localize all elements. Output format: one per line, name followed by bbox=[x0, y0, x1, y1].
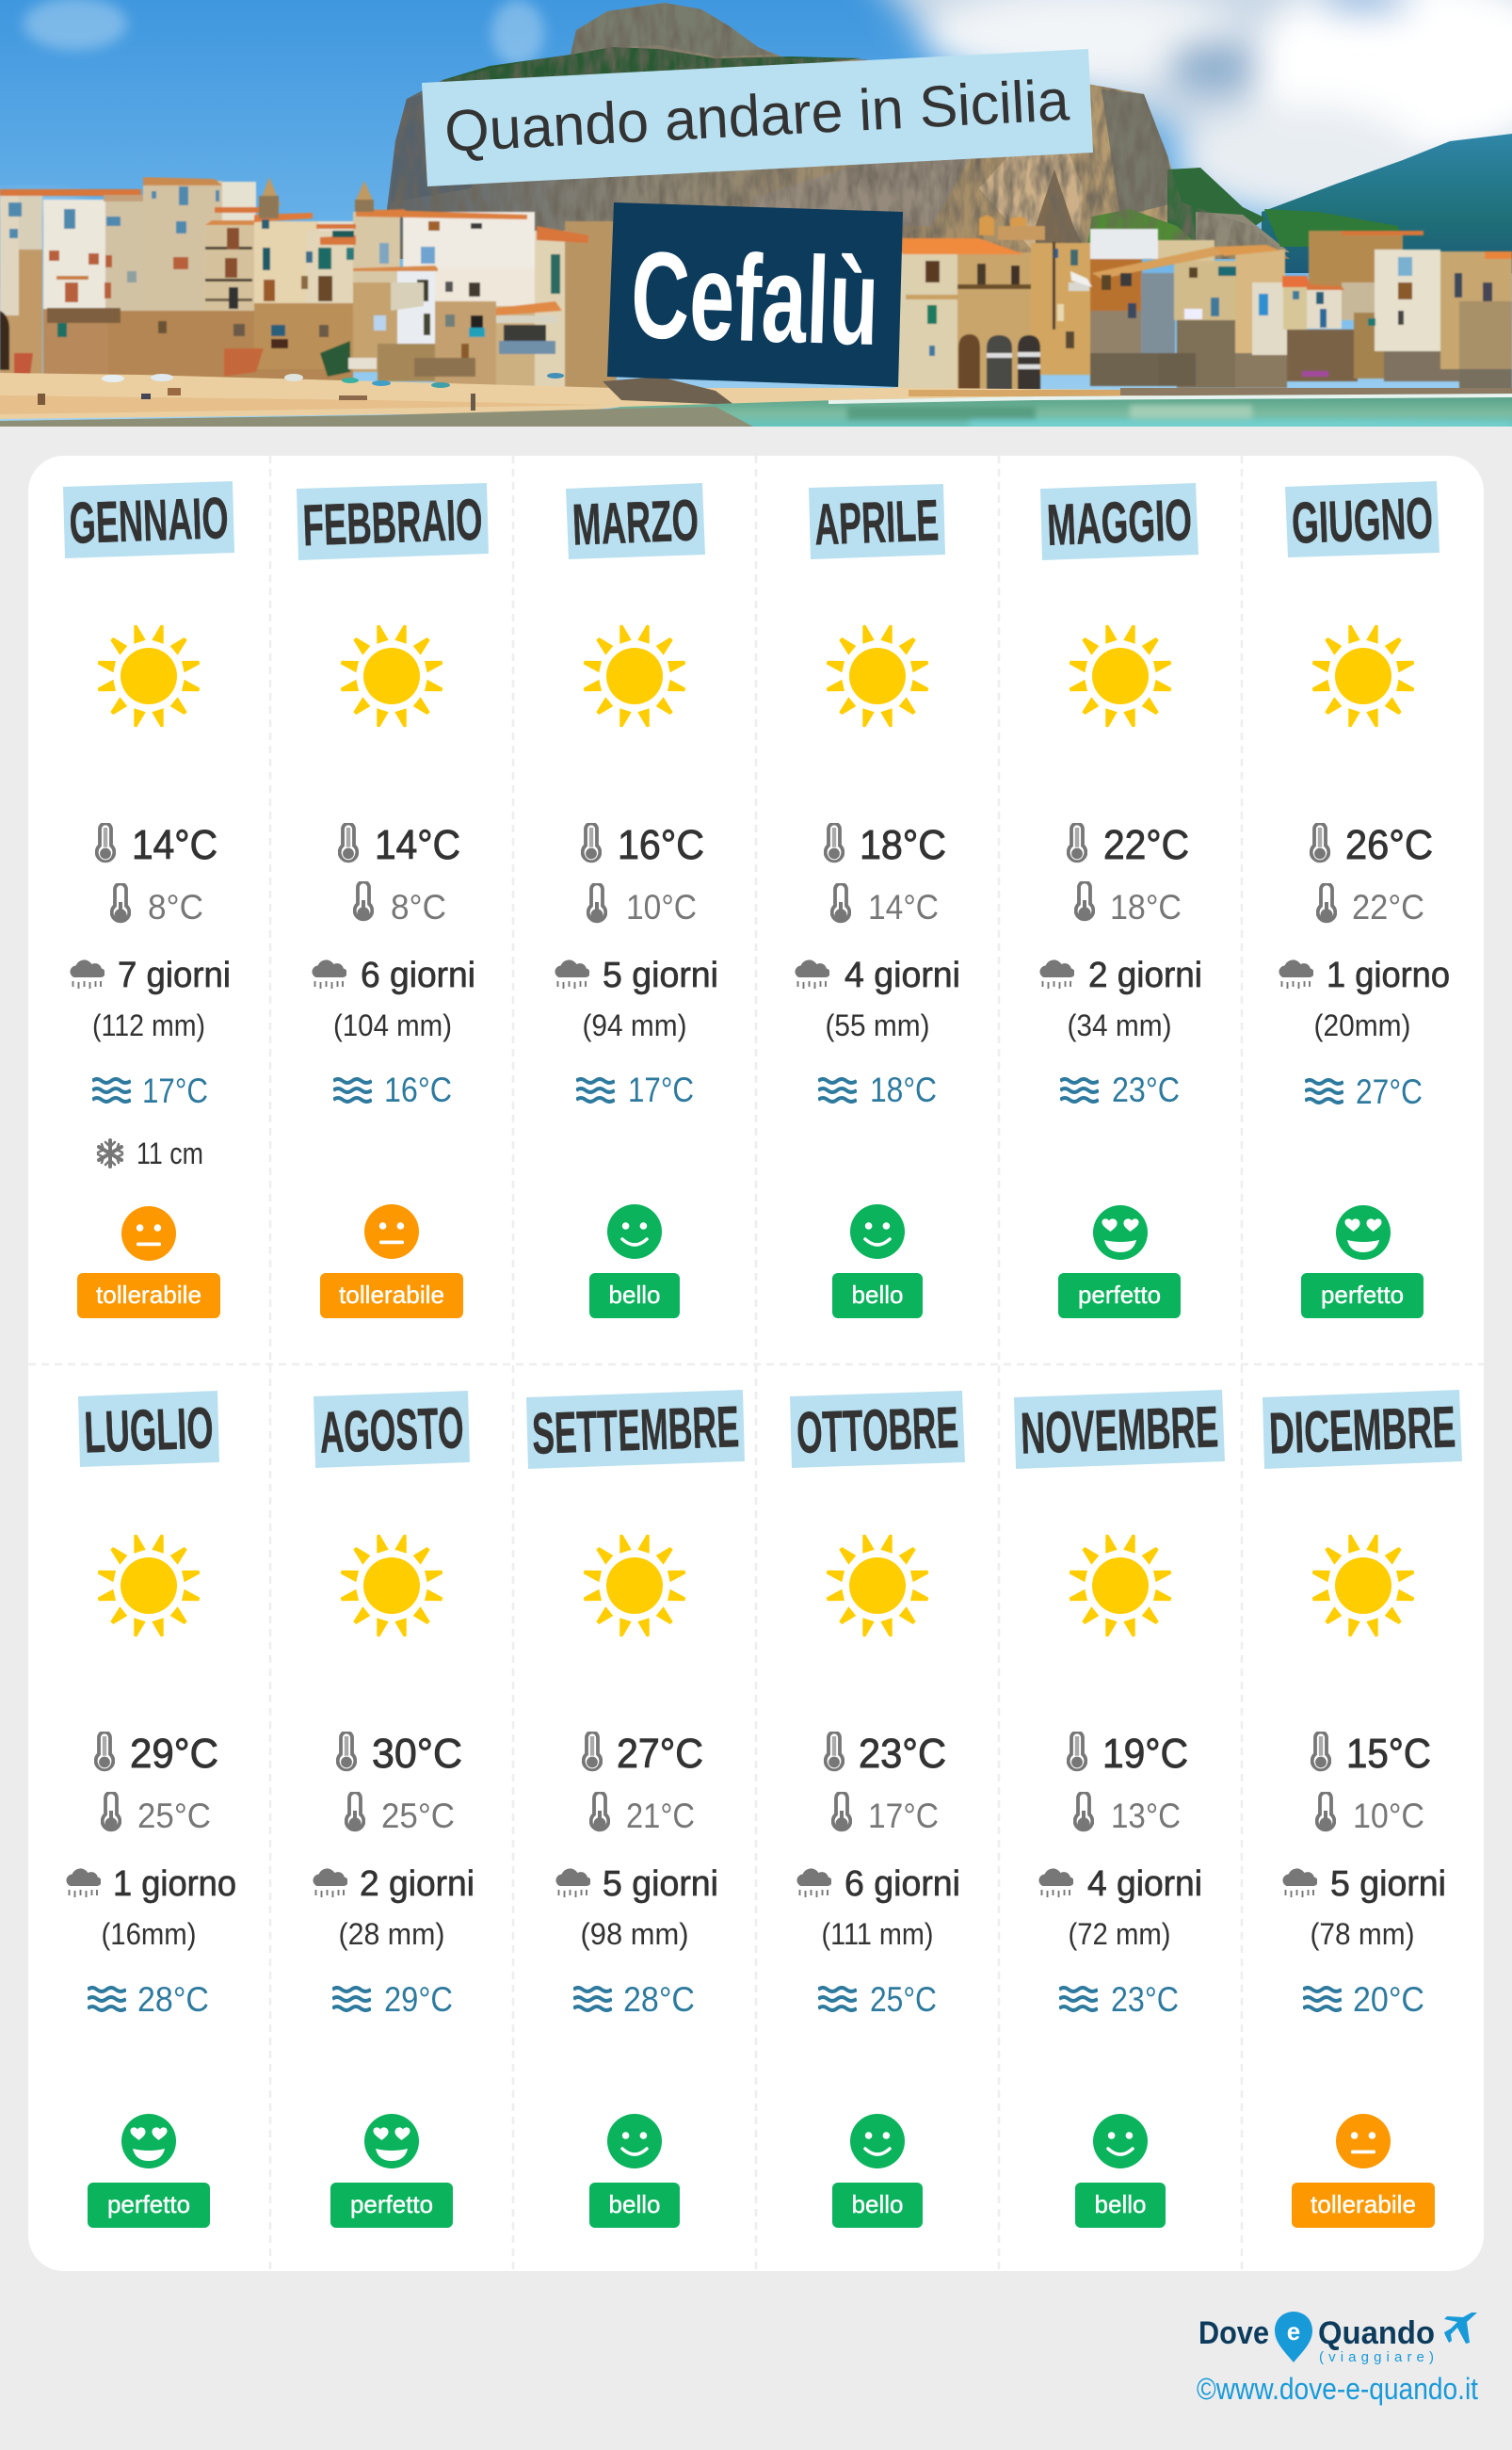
sea temperature: 23°C bbox=[1112, 1071, 1180, 1109]
month label: SETTEMBRE bbox=[531, 1394, 740, 1467]
rainfall: (104 mm) bbox=[333, 1008, 452, 1042]
min temperature bbox=[1318, 883, 1424, 927]
month label: NOVEMBRE bbox=[1020, 1394, 1219, 1467]
month label: OTTOBRE bbox=[796, 1395, 959, 1466]
rainfall: (55 mm) bbox=[825, 1008, 930, 1042]
max temperature bbox=[826, 1731, 946, 1777]
max temperature: 15°C bbox=[1346, 1731, 1431, 1777]
max temperature bbox=[97, 822, 217, 868]
icon: sun bbox=[827, 1535, 928, 1636]
rating face bbox=[1336, 1205, 1391, 1260]
min temperature bbox=[1317, 1793, 1424, 1835]
max temperature bbox=[340, 822, 460, 868]
city name box: Cefalù bbox=[629, 225, 881, 371]
panel: dicembre bbox=[1263, 1390, 1462, 2228]
panel: maggio bbox=[1039, 483, 1202, 1318]
month label bbox=[78, 1391, 219, 1467]
rain days bbox=[1039, 956, 1202, 995]
rain days: 4 giorni bbox=[844, 956, 960, 995]
icon: sun bbox=[341, 1535, 442, 1636]
month label: LUGLIO bbox=[83, 1395, 215, 1466]
sea temperature bbox=[573, 1980, 695, 2019]
rating badge bbox=[77, 1273, 220, 1318]
panel: agosto bbox=[313, 1391, 475, 2228]
min temperature: 17°C bbox=[868, 1797, 939, 1835]
city name box bbox=[607, 202, 903, 387]
rating badge: bello bbox=[851, 2190, 904, 2218]
rating face bbox=[1336, 2114, 1391, 2168]
month label bbox=[63, 481, 234, 558]
rating badge bbox=[1292, 2183, 1435, 2228]
icon: sun bbox=[584, 625, 685, 727]
rating face bbox=[1093, 2114, 1148, 2168]
rating badge: tollerabile bbox=[339, 1281, 444, 1309]
month label: AGOSTO bbox=[318, 1395, 465, 1466]
max temperature: 23°C bbox=[859, 1731, 946, 1777]
min temperature: 25°C bbox=[381, 1797, 455, 1835]
rain days bbox=[1279, 956, 1450, 995]
rating badge: tollerabile bbox=[1311, 2190, 1416, 2218]
max temperature: 27°C bbox=[617, 1731, 703, 1777]
website credit: ©www.dove-e-quando.it bbox=[1197, 2372, 1478, 2406]
min temperature: 8°C bbox=[148, 888, 203, 927]
rating face bbox=[850, 1204, 905, 1259]
rating badge: perfetto bbox=[350, 2190, 433, 2218]
icon: sun bbox=[827, 625, 928, 727]
min temperature bbox=[588, 883, 697, 927]
sea temperature bbox=[333, 1071, 452, 1109]
min temperature bbox=[591, 1793, 695, 1835]
rating badge: bello bbox=[851, 1281, 904, 1309]
icon: sun bbox=[1070, 625, 1171, 727]
rain days: 6 giorni bbox=[844, 1864, 960, 1904]
sea temperature: 17°C bbox=[628, 1071, 694, 1109]
rating badge bbox=[832, 2183, 923, 2228]
logo: Dove e Quando: Dove bbox=[1198, 2315, 1269, 2351]
rating badge: perfetto bbox=[107, 2190, 190, 2218]
icon: sun bbox=[584, 1535, 685, 1636]
white card bbox=[28, 456, 1484, 2271]
min temperature bbox=[112, 883, 203, 927]
max temperature bbox=[96, 1731, 218, 1777]
month label: GENNAIO bbox=[68, 486, 230, 556]
rain days: 5 giorni bbox=[603, 956, 718, 995]
min temperature bbox=[355, 881, 446, 927]
panel: febbraio bbox=[297, 483, 489, 1318]
title ribbon bbox=[422, 49, 1093, 186]
max temperature: 14°C bbox=[375, 822, 460, 868]
rock of Cefalù bbox=[386, 0, 1403, 259]
rating badge: perfetto bbox=[1078, 1281, 1161, 1309]
min temperature: 25°C bbox=[137, 1797, 211, 1835]
rating badge bbox=[330, 2183, 453, 2228]
rating badge bbox=[1075, 2183, 1166, 2228]
town buildings, right bbox=[894, 215, 1512, 393]
min temperature bbox=[1075, 1793, 1181, 1835]
icon: sun bbox=[1070, 1535, 1171, 1636]
rain days: 1 giorno bbox=[113, 1864, 236, 1904]
min temperature bbox=[103, 1793, 211, 1835]
min temperature: 21°C bbox=[626, 1797, 695, 1835]
sea temperature bbox=[92, 1072, 208, 1110]
month label: APRILE bbox=[813, 488, 940, 558]
distant mountain bbox=[1262, 134, 1512, 273]
rainfall: (78 mm) bbox=[1311, 1917, 1414, 1951]
rain days: 7 giorni bbox=[118, 956, 231, 995]
sea temperature: 20°C bbox=[1353, 1980, 1424, 2019]
month label bbox=[314, 1391, 470, 1468]
rating face bbox=[364, 2114, 419, 2168]
sea temperature bbox=[88, 1980, 209, 2019]
max temperature: 29°C bbox=[130, 1731, 218, 1777]
max temperature bbox=[1069, 822, 1189, 868]
panel: luglio bbox=[66, 1391, 236, 2228]
rain days: 6 giorni bbox=[361, 956, 475, 995]
sea temperature: 29°C bbox=[384, 1980, 453, 2019]
rainfall: (20mm) bbox=[1314, 1008, 1410, 1042]
month label: MAGGIO bbox=[1046, 488, 1193, 558]
rating face bbox=[364, 1204, 419, 1259]
panel: marzo bbox=[555, 483, 718, 1318]
month label bbox=[809, 484, 945, 559]
sea temperature: 16°C bbox=[384, 1071, 452, 1109]
panel: settembre bbox=[526, 1390, 745, 2228]
max temperature bbox=[583, 822, 704, 868]
panel: aprile bbox=[795, 484, 960, 1318]
sea temperature: 25°C bbox=[870, 1980, 937, 2019]
rating face bbox=[850, 2114, 905, 2168]
month label bbox=[1285, 481, 1440, 557]
rain days: 5 giorni bbox=[603, 1864, 718, 1904]
month label: FEBBRAIO bbox=[301, 488, 484, 558]
icon: sun bbox=[341, 625, 442, 727]
rating badge: bello bbox=[608, 2190, 661, 2218]
icon: sun bbox=[1312, 625, 1414, 727]
max temperature: 18°C bbox=[860, 822, 946, 868]
rainfall: (72 mm) bbox=[1068, 1917, 1171, 1951]
sea temperature bbox=[1059, 1980, 1179, 2019]
rating badge bbox=[832, 1273, 923, 1318]
min temperature bbox=[832, 883, 939, 927]
min temperature: 22°C bbox=[1352, 888, 1424, 927]
logo: Dove e Quando bbox=[1198, 2312, 1477, 2365]
sea temperature: 28°C bbox=[137, 1980, 209, 2019]
snow bbox=[98, 1136, 203, 1170]
sea temperature bbox=[818, 1980, 937, 2019]
logo: Dove e Quando: (viaggiare) bbox=[1319, 2349, 1434, 2365]
rain days: 2 giorni bbox=[360, 1864, 475, 1904]
rainfall: (34 mm) bbox=[1068, 1008, 1171, 1042]
hero photo: Cefalù seafront bbox=[0, 0, 1512, 429]
sea temperature bbox=[576, 1071, 694, 1109]
icon: map pin bbox=[1275, 2312, 1312, 2362]
rain days bbox=[795, 956, 960, 995]
rating face bbox=[121, 1206, 176, 1261]
sea temperature: 28°C bbox=[623, 1980, 695, 2019]
rain days: 2 giorni bbox=[1088, 956, 1202, 995]
parasols and bathers bbox=[38, 373, 564, 411]
sea temperature bbox=[1060, 1071, 1180, 1109]
icon: map pin: e bbox=[1287, 2317, 1300, 2345]
month label bbox=[526, 1390, 745, 1469]
rating badge bbox=[320, 1273, 463, 1318]
rating badge: tollerabile bbox=[96, 1281, 201, 1309]
rain days: 1 giorno bbox=[1327, 956, 1450, 995]
icon: sun bbox=[1312, 1535, 1414, 1636]
rating badge: bello bbox=[1094, 2190, 1147, 2218]
rating face bbox=[121, 2114, 176, 2168]
month label bbox=[790, 1391, 965, 1468]
sea temperature bbox=[818, 1071, 937, 1109]
panel: novembre bbox=[1014, 1390, 1225, 2228]
sea temperature: 23°C bbox=[1111, 1980, 1179, 2019]
sea temperature bbox=[1305, 1072, 1423, 1111]
min temperature bbox=[833, 1793, 939, 1835]
max temperature bbox=[1312, 1731, 1431, 1777]
sea temperature: 27°C bbox=[1356, 1072, 1423, 1111]
min temperature: 10°C bbox=[626, 888, 697, 927]
month label: MARZO bbox=[571, 488, 700, 558]
rating badge bbox=[589, 1273, 680, 1318]
icon: sun bbox=[98, 1535, 200, 1636]
panel: giugno bbox=[1279, 481, 1450, 1318]
max temperature bbox=[1069, 1731, 1188, 1777]
month label bbox=[1040, 483, 1198, 560]
beach bbox=[0, 373, 1171, 419]
max temperature: 14°C bbox=[132, 822, 217, 868]
rain days: 4 giorni bbox=[1087, 1864, 1202, 1904]
month label bbox=[297, 483, 489, 560]
rating face bbox=[607, 1204, 662, 1259]
rainfall: (28 mm) bbox=[339, 1917, 444, 1951]
rainfall: (111 mm) bbox=[821, 1917, 934, 1951]
month label bbox=[1014, 1390, 1225, 1469]
max temperature: 16°C bbox=[618, 822, 704, 868]
rainfall: (98 mm) bbox=[580, 1917, 689, 1951]
month label bbox=[566, 483, 705, 559]
min temperature: 8°C bbox=[391, 888, 446, 927]
max temperature: 26°C bbox=[1345, 822, 1433, 868]
town buildings, left bbox=[0, 177, 617, 395]
sea temperature bbox=[1303, 1980, 1424, 2019]
rating badge bbox=[88, 2183, 210, 2228]
rating face bbox=[1093, 1205, 1148, 1260]
logo: Dove e Quando: Quando bbox=[1318, 2315, 1435, 2351]
min temperature: 13°C bbox=[1111, 1797, 1181, 1835]
sea bbox=[0, 394, 1512, 427]
rain days bbox=[312, 956, 475, 995]
rainfall: (112 mm) bbox=[92, 1008, 205, 1042]
rating badge: bello bbox=[608, 1281, 661, 1309]
icon: sun bbox=[98, 625, 200, 727]
panel: ottobre bbox=[790, 1391, 965, 2228]
max temperature bbox=[1311, 822, 1433, 868]
rain days: 5 giorni bbox=[1330, 1864, 1446, 1904]
max temperature bbox=[584, 1731, 703, 1777]
snow: 11 cm bbox=[137, 1136, 203, 1170]
min temperature: 10°C bbox=[1353, 1797, 1424, 1835]
sea temperature: 17°C bbox=[142, 1072, 208, 1110]
rating badge bbox=[1301, 1273, 1424, 1318]
title ribbon: Quando andare in Sicilia bbox=[443, 68, 1071, 165]
rating badge bbox=[589, 2183, 680, 2228]
rainfall: (94 mm) bbox=[582, 1008, 687, 1042]
sea temperature: 18°C bbox=[870, 1071, 937, 1109]
max temperature bbox=[826, 822, 946, 868]
rain days bbox=[70, 956, 231, 995]
rating face bbox=[607, 2114, 662, 2168]
min temperature: 14°C bbox=[868, 888, 939, 927]
max temperature: 19°C bbox=[1102, 1731, 1188, 1777]
min temperature bbox=[346, 1793, 455, 1835]
min temperature bbox=[1076, 881, 1182, 927]
icon: airplane bbox=[1444, 2313, 1477, 2344]
max temperature: 22°C bbox=[1103, 822, 1189, 868]
max temperature: 30°C bbox=[372, 1731, 462, 1777]
panel: gennaio bbox=[63, 481, 234, 1318]
rating badge bbox=[1058, 1273, 1181, 1318]
rating badge: perfetto bbox=[1321, 1281, 1404, 1309]
rain days bbox=[1038, 1864, 1202, 1904]
sea temperature bbox=[332, 1980, 453, 2019]
rainfall: (16mm) bbox=[102, 1917, 196, 1951]
min temperature: 18°C bbox=[1110, 888, 1182, 927]
